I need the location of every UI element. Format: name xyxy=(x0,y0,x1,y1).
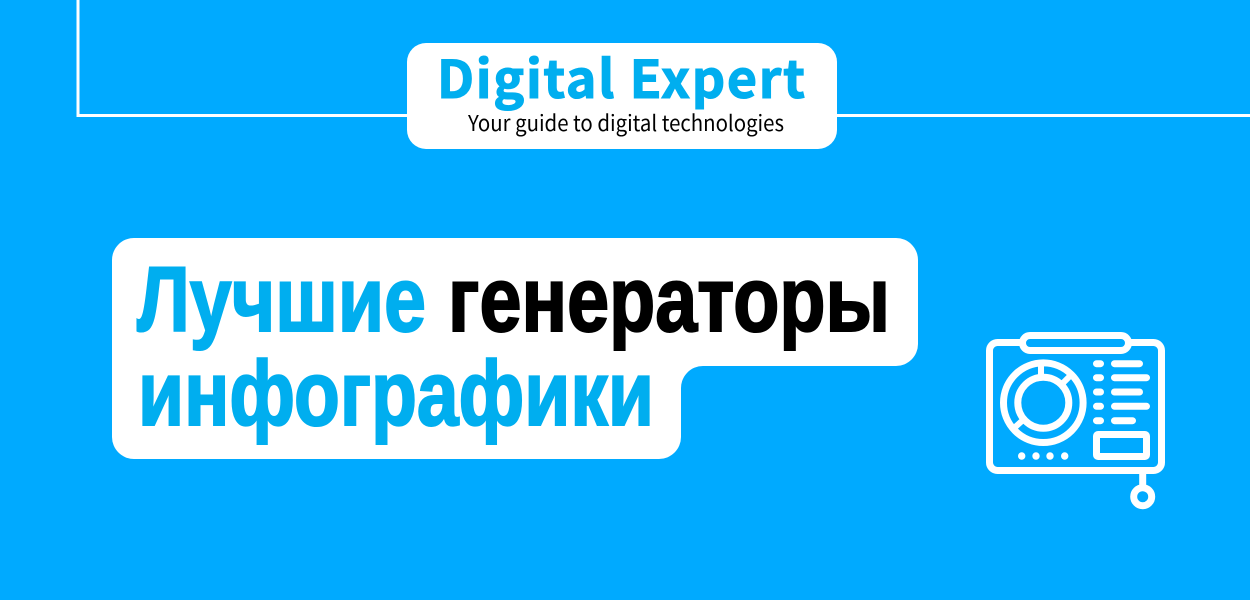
panel: logo xyxy=(407,38,837,149)
title word: генераторы: генераторы xyxy=(448,249,890,351)
list rows xyxy=(1096,364,1146,421)
logo background xyxy=(407,43,837,149)
board outline xyxy=(990,342,1162,470)
pendant ring xyxy=(1134,472,1152,506)
icon: dashboard board xyxy=(990,336,1162,506)
logo title: Digital Expert xyxy=(437,38,805,113)
small rectangle xyxy=(1096,434,1146,456)
title word: Лучшие: Лучшие xyxy=(137,249,426,351)
donut chart xyxy=(1004,363,1083,443)
top clip xyxy=(1022,336,1128,350)
frame line xyxy=(78,0,1250,116)
title background xyxy=(112,238,918,459)
title word: инфографики: инфографики xyxy=(138,343,654,445)
panel: title xyxy=(112,238,918,459)
logo tagline: Your guide to digital technologies xyxy=(467,106,784,138)
dots row xyxy=(1018,452,1068,460)
